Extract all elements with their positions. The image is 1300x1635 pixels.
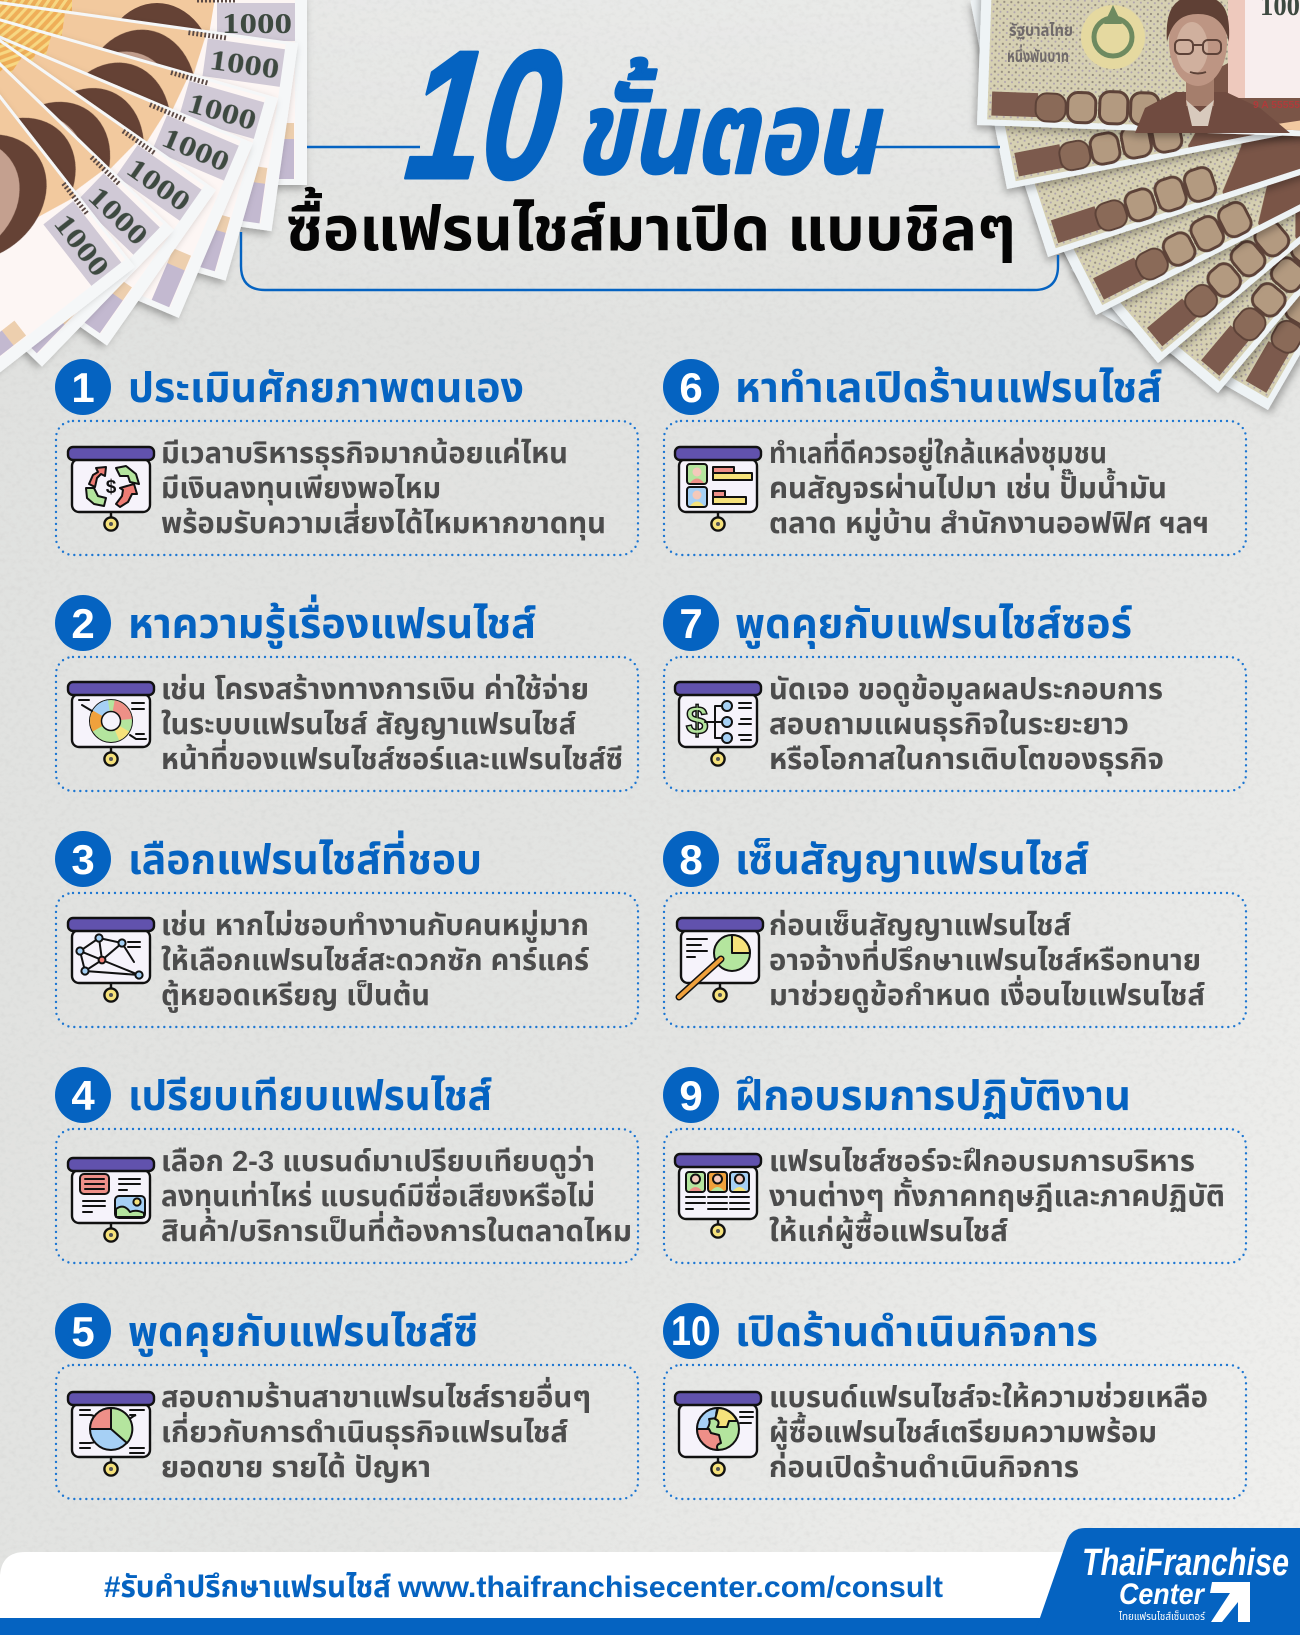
banknote fan: top left: 1000 — [82, 181, 153, 252]
footer bar — [0, 1552, 1300, 1635]
description: เช่น หากไม่ชอบทำงานกับคนหมู่มาก — [161, 910, 589, 943]
icon: network board — [68, 918, 154, 1002]
banknote fan: top left: 1000 — [208, 45, 281, 85]
step 6: หาทำเลเปิดร้านแฟรนไชส์ — [735, 364, 1162, 411]
description: หน้าที่ของแฟรนไชส์ซอร์และแฟรนไชส์ซี — [161, 738, 623, 776]
step 8: 8 — [679, 836, 703, 883]
step 1: ประเมินศักยภาพตนเอง — [128, 364, 524, 411]
step 5: พูดคุยกับแฟรนไชส์ซี — [128, 1308, 478, 1357]
description: ตลาด หมู่บ้าน สำนักงานออฟฟิศ ฯลฯ — [769, 508, 1209, 541]
description: ก่อนเซ็นสัญญาแฟรนไชส์ — [769, 910, 1071, 942]
banknote fan: top right: 9 A 55555 — [1253, 100, 1300, 111]
icon: team cards board — [675, 1154, 761, 1238]
step 3: เลือกแฟรนไชส์ที่ชอบ — [128, 830, 482, 883]
description: สินค้า/บริการเป็นที่ต้องการในตลาดไหม — [161, 1210, 632, 1248]
subtitle: ซื้อแฟรนไชส์มาเปิด แบบชิลๆ — [286, 186, 1016, 263]
step 2 — [55, 594, 638, 791]
description: งานต่างๆ ทั้งภาคทฤษฎีและภาคปฏิบัติ — [769, 1176, 1225, 1213]
banknote fan: top left: 1000 — [184, 88, 260, 137]
description: หรือโอกาสในการเติบโตของธุรกิจ — [769, 744, 1164, 776]
description — [161, 674, 623, 776]
description: อาจจ้างที่ปรึกษาแฟรนไชส์หรือทนาย — [769, 939, 1201, 977]
description: ยอดขาย รายได้ ปัญหา — [161, 1452, 431, 1484]
icon: logo arrow — [1210, 1582, 1250, 1622]
icon: puzzle board — [675, 1392, 761, 1476]
step 9: ฝึกอบรมการปฏิบัติงาน — [735, 1072, 1131, 1119]
description — [161, 438, 606, 540]
title: 10 steps: 10 — [399, 12, 570, 217]
icon: profile bars board — [675, 447, 761, 531]
banknote fan: top left: 1000 — [121, 153, 196, 218]
description — [161, 1146, 632, 1248]
step 1 — [55, 359, 638, 555]
description: คนสัญจรผ่านไปมา เช่น ปั๊มน้ำมัน — [769, 467, 1167, 505]
banknote fan: top left — [0, 0, 307, 384]
step 2: หาความรู้เรื่องแฟรนไชส์ — [128, 594, 536, 649]
description: แบรนด์แฟรนไชส์จะให้ความช่วยเหลือ — [769, 1382, 1208, 1414]
step 2: 2 — [71, 600, 95, 647]
description: สอบถามร้านสาขาแฟรนไชส์รายอื่นๆ — [161, 1376, 591, 1414]
title frame lines — [241, 147, 1058, 290]
step 3 — [55, 830, 638, 1027]
icon: pie and pointer board — [677, 918, 763, 1002]
footer link text: #รับคำปรึกษาแฟรนไชส์ — [104, 1571, 391, 1604]
description: พร้อมรับความเสี่ยงได้ไหมหากขาดทุน — [161, 502, 606, 540]
step 10: 10 — [671, 1307, 711, 1354]
description: เกี่ยวกับการดำเนินธุรกิจแฟรนไชส์ — [161, 1411, 568, 1449]
description: ตู้หยอดเหรียญ เป็นต้น — [161, 980, 430, 1013]
step 1: 1 — [71, 364, 95, 411]
icon: donut chart board — [68, 682, 154, 766]
step 9: 9 — [679, 1072, 703, 1119]
description: มีเวลาบริหารธุรกิจมากน้อยแค่ไหน — [161, 438, 568, 470]
description: ผู้ซื้อแฟรนไชส์เตรียมความพร้อม — [769, 1411, 1157, 1450]
step 5: 5 — [71, 1308, 95, 1355]
description: แฟรนไชส์ซอร์จะฝึกอบรมการบริหาร — [769, 1146, 1195, 1178]
step 5 — [55, 1303, 638, 1499]
title: 10 steps: ขั้นตอน — [574, 57, 883, 198]
description: เช่น โครงสร้างทางการเงิน ค่าใช้จ่าย — [161, 674, 589, 706]
description: ลงทุนเท่าไหร่ แบรนด์มีชื่อเสียงหรือไม่ — [161, 1175, 595, 1213]
description — [161, 1376, 591, 1484]
step 8 — [663, 831, 1246, 1027]
icon: dollar flow board — [675, 682, 761, 766]
step 4 — [55, 1067, 638, 1263]
description — [769, 1146, 1225, 1249]
step 4: เปรียบเทียบแฟรนไชส์ — [128, 1072, 492, 1119]
banknote fan: top left: 1000 — [157, 123, 234, 179]
banknote fan: top right: รัฐบาลไทย — [1009, 21, 1073, 40]
step 7: 7 — [679, 600, 703, 647]
step 8: เซ็นสัญญาแฟรนไชส์ — [735, 836, 1089, 883]
description: เลือก 2-3 แบรนด์มาเปรียบเทียบดูว่า — [161, 1146, 595, 1179]
footer link text — [104, 1571, 943, 1604]
logo: ThaiFranchise Center: Center — [1119, 1578, 1206, 1611]
description: มาช่วยดูข้อกำหนด เงื่อนไขแฟรนไชส์ — [769, 974, 1205, 1013]
description — [769, 1382, 1208, 1484]
step 3: 3 — [71, 836, 95, 883]
description — [161, 910, 589, 1013]
step 4: 4 — [71, 1072, 95, 1119]
description: ในระบบแฟรนไชส์ สัญญาแฟรนไชส์ — [161, 709, 576, 741]
logo: ThaiFranchise Center — [1034, 1528, 1300, 1635]
banknote fan: top left: 1000 — [222, 9, 292, 40]
banknote fan: top right: หนึ่งพันบาท — [1007, 44, 1069, 66]
description — [769, 674, 1164, 776]
step 7 — [663, 595, 1246, 791]
icon: money arrows board — [68, 447, 154, 531]
banknote fan: top right — [970, 0, 1300, 410]
step 10 — [663, 1303, 1246, 1499]
description: ให้แก่ผู้ซื้อแฟรนไชส์ — [769, 1210, 1008, 1249]
step 6 — [663, 359, 1246, 555]
step 10: เปิดร้านดำเนินกิจการ — [735, 1308, 1098, 1355]
icon: money arrows board: $ — [106, 477, 117, 498]
description: ทำเลที่ดีควรอยู่ใกล้แหล่งชุมชน — [769, 432, 1107, 471]
description: มีเงินลงทุนเพียงพอไหม — [161, 473, 441, 505]
step 6: 6 — [679, 364, 703, 411]
title: 10 steps — [399, 12, 883, 217]
description — [769, 432, 1209, 541]
icon: dollar flow board: $ — [686, 699, 708, 743]
banknote fan: top left: 1000 — [47, 209, 115, 283]
step 9 — [663, 1067, 1246, 1263]
description: ให้เลือกแฟรนไชส์สะดวกซัก คาร์แคร์ — [161, 945, 589, 977]
logo: ThaiFranchise Center: ไทยแฟรนไชส์เซ็นเตอร์ — [1118, 1611, 1205, 1623]
step 7: พูดคุยกับแฟรนไชส์ซอร์ — [735, 600, 1132, 649]
icon: pie chart board — [68, 1392, 154, 1476]
footer link text: www.thaifranchisecenter.com/consult — [397, 1571, 943, 1604]
description — [769, 910, 1205, 1013]
description: นัดเจอ ขอดูข้อมูลผลประกอบการ — [769, 674, 1163, 707]
description: สอบถามแผนธุรกิจในระยะยาว — [769, 709, 1129, 741]
icon: report board — [68, 1158, 154, 1242]
description: ก่อนเปิดร้านดำเนินกิจการ — [769, 1452, 1079, 1484]
